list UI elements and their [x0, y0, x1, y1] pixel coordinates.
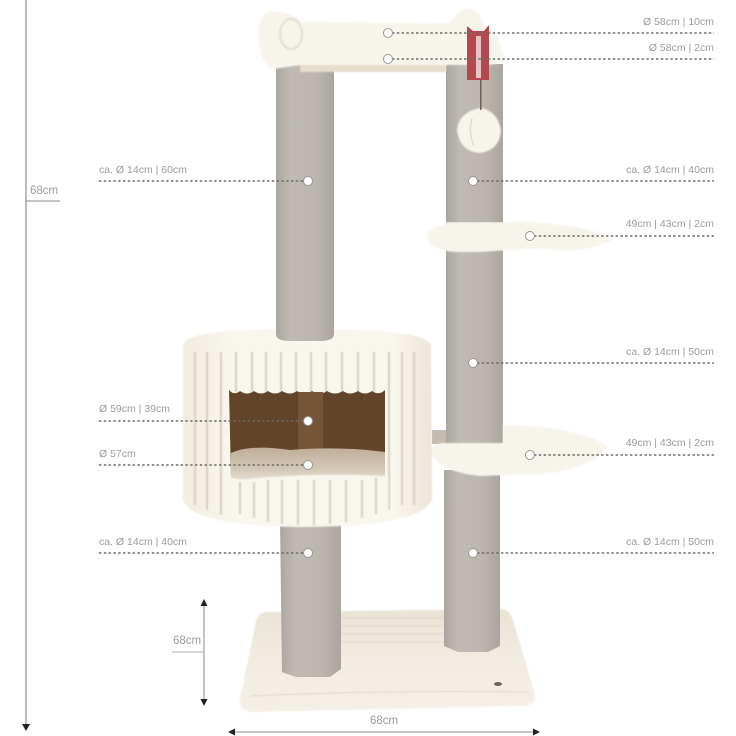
dimension line: lower right post: ca. Ø 14cm | 50cm [626, 536, 714, 548]
dimension line: top platform base: Ø 58cm | 2cm [649, 42, 714, 54]
top platform [258, 8, 505, 72]
toy string [480, 80, 482, 110]
base width arrow: 68cm [370, 715, 398, 727]
total height arrow: 68cm [30, 185, 58, 197]
tag label [476, 36, 481, 78]
drum bed [183, 320, 432, 527]
toy ball [457, 108, 501, 153]
dimension line: lower left post: ca. Ø 14cm | 40cm [99, 536, 187, 548]
dimension line: upper shelf [526, 218, 714, 240]
lower shelf [430, 425, 608, 476]
dimension line: lower shelf: 49cm | 43cm | 2cm [626, 437, 714, 449]
lower left post [280, 520, 341, 677]
drum body [183, 329, 432, 527]
drum opening [229, 390, 385, 482]
base depth arrow [172, 599, 208, 706]
upper shelf [426, 222, 612, 252]
dimension line: long left post [99, 164, 312, 186]
red tag [467, 25, 489, 80]
dimension line: top platform height: Ø 58cm | 10cm [643, 16, 714, 28]
dimension line: top platform height [384, 16, 714, 38]
dimension line: upper right post: ca. Ø 14cm | 40cm [626, 164, 714, 176]
rear shelf support stub [432, 430, 446, 444]
dimension line: lower shelf [526, 437, 714, 460]
upper left post [276, 64, 334, 341]
upper right post [446, 64, 503, 446]
dimension line: middle right post: ca. Ø 14cm | 50cm [626, 346, 714, 358]
dimension line: drum interior: Ø 57cm [99, 448, 136, 460]
drum front lip [230, 475, 388, 520]
total height arrow [22, 0, 60, 731]
lower right post [444, 470, 500, 652]
dimension line: upper shelf: 49cm | 43cm | 2cm [626, 218, 714, 230]
inner rear panel [298, 392, 323, 450]
dimension line: drum interior [99, 448, 312, 470]
dimension line: top platform base [384, 42, 714, 64]
base logo [494, 682, 502, 686]
dimension line: lower left post [99, 536, 312, 558]
cat tree illustration [183, 8, 612, 712]
upper post over drum top [276, 320, 334, 341]
drum ribs [195, 352, 414, 515]
dimension line: drum size: Ø 59cm | 39cm [99, 403, 170, 415]
base depth arrow: 68cm [173, 635, 201, 647]
cushion [231, 448, 385, 484]
base plate [240, 609, 535, 712]
dimension line: drum size [99, 403, 312, 426]
dimension line: long left post: ca. Ø 14cm | 60cm [99, 164, 187, 176]
dimension line: upper right post [468, 164, 714, 186]
dimension line: middle right post [468, 346, 714, 368]
dimension line: lower right post [468, 536, 714, 558]
base width arrow [228, 715, 540, 736]
